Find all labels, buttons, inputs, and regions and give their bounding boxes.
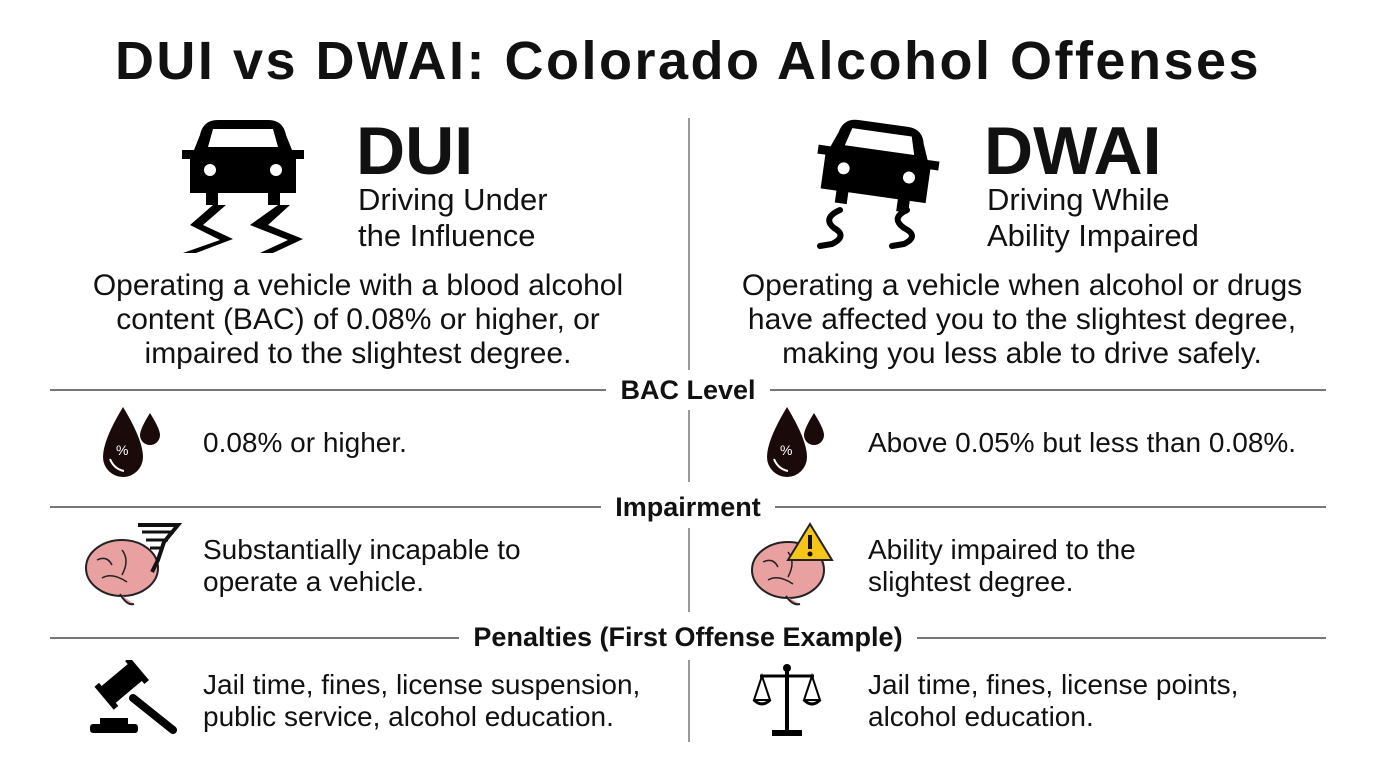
section: Impairment: Impairment (615, 492, 761, 522)
title: DUI vs DWAI: Colorado Alcohol Offenses (115, 31, 1261, 91)
vertical divider top (688, 118, 690, 370)
DUI penalties text: Jail time, fines, license suspension, (203, 669, 640, 700)
icon: brain warning (751, 522, 834, 606)
DUI description (93, 269, 623, 370)
icon: DUI car (182, 120, 304, 253)
DWAI BAC text: Above 0.05% but less than 0.08%. (868, 427, 1296, 458)
section: BAC Level: BAC Level (620, 375, 756, 405)
DWAI impairment text: slightest degree. (868, 566, 1073, 597)
DWAI description: have affected you to the slightest degree, (748, 303, 1296, 336)
DUI BAC text: 0.08% or higher. (203, 427, 407, 458)
DWAI penalties text: alcohol education. (868, 701, 1094, 732)
DUI subtitle (358, 182, 548, 253)
DUI subtitle: the Influence (358, 218, 536, 253)
icon: BAC drop right (767, 407, 824, 477)
DWAI description: Operating a vehicle when alcohol or drugs (742, 269, 1302, 302)
DWAI subtitle: Ability Impaired (987, 218, 1199, 253)
icon: BAC drop left (103, 407, 160, 477)
DUI description: impaired to the slightest degree. (145, 337, 571, 370)
icon: gavel (90, 660, 177, 734)
DWAI penalties text (868, 669, 1238, 732)
DWAI impairment text: Ability impaired to the (868, 534, 1136, 565)
icon: BAC drop right: % (780, 442, 792, 458)
DUI penalties text: public service, alcohol education. (203, 701, 614, 732)
DUI heading: DUI (356, 113, 473, 189)
DUI subtitle: Driving Under (358, 182, 548, 217)
icon: DWAI car (817, 120, 940, 249)
icon: BAC drop left: % (116, 442, 128, 458)
DWAI description (742, 269, 1302, 370)
DWAI description: making you less able to drive safely. (782, 337, 1262, 370)
DWAI penalties text: Jail time, fines, license points, (868, 669, 1238, 700)
section: Penalties: Penalties (First Offense Example) (473, 622, 903, 652)
icon: brain tornado (85, 523, 182, 606)
DUI impairment text: operate a vehicle. (203, 566, 424, 597)
DUI impairment text: Substantially incapable to (203, 534, 521, 565)
DWAI heading: DWAI (984, 113, 1162, 189)
icon: scales (752, 664, 822, 736)
DWAI impairment text (868, 534, 1136, 597)
DWAI subtitle (987, 182, 1199, 253)
DUI penalties text (203, 669, 640, 732)
DUI description: Operating a vehicle with a blood alcohol (93, 269, 623, 302)
DWAI subtitle: Driving While (987, 182, 1170, 217)
DUI impairment text (203, 534, 521, 597)
DUI description: content (BAC) of 0.08% or higher, or (116, 303, 600, 336)
